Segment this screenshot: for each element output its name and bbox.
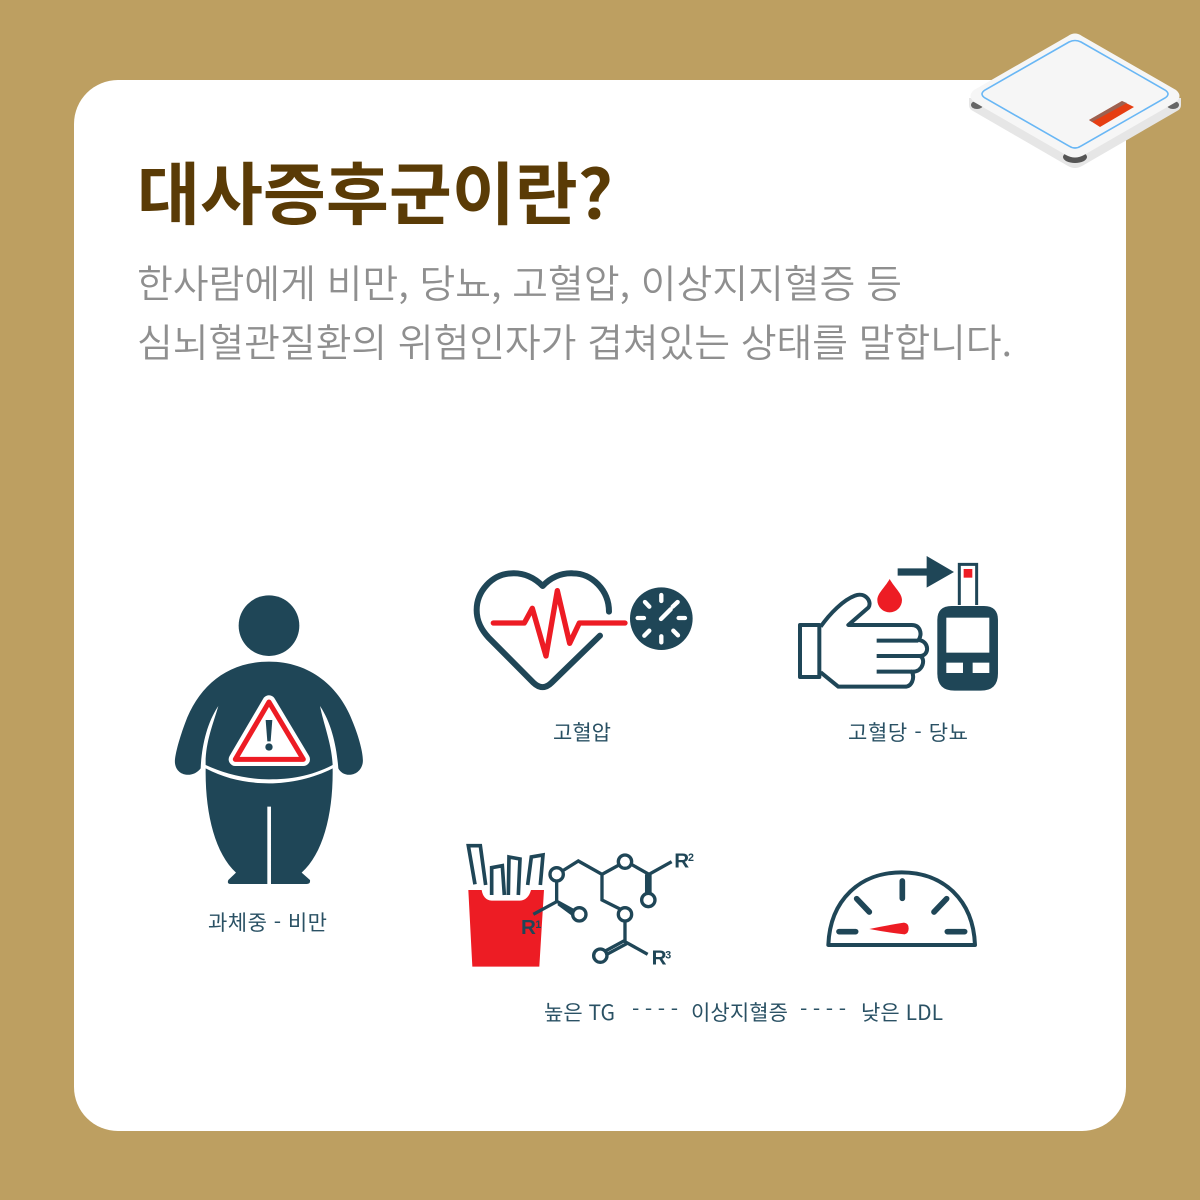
icon: fries and triglyceride molecule: 2 [688,852,694,864]
icon: fries and triglyceride molecule: 3 [665,949,671,961]
icon: fries and triglyceride molecule [468,846,694,969]
icon: overweight person with warning [175,595,363,884]
icon: fries and triglyceride molecule: R [652,946,667,969]
labels: lipid abnormality row: ---- [632,994,678,1024]
icon: fries and triglyceride molecule: R [674,849,689,872]
icon: hand, blood drop and glucose meter [800,556,998,691]
label: high blood sugar: 고혈당 - 당뇨 [848,717,968,747]
icon: fries and triglyceride molecule: 1 [535,919,541,931]
title: 대사증후군이란? [137,140,613,239]
label: overweight: 과체중 - 비만 [208,907,327,937]
intro text block [137,254,1012,369]
intro text block: 한사람에게 비만, 당뇨, 고혈압, 이상지지혈증 등 [137,254,902,310]
labels: lipid abnormality row: 낮은 LDL [861,997,943,1027]
icon: low LDL gauge [828,872,975,945]
labels: lipid abnormality row: ---- [800,994,846,1024]
labels: lipid abnormality row [544,994,943,1027]
icon: heart with blood pressure gauge [477,573,693,687]
intro text block: 심뇌혈관질환의 위험인자가 겹쳐있는 상태를 말합니다. [137,313,1012,369]
white card panel [74,80,1126,1131]
label: hypertension: 고혈압 [553,717,611,747]
icon: bathroom scale [969,34,1181,168]
labels: lipid abnormality row: 높은 TG [544,997,615,1027]
labels: lipid abnormality row: 이상지혈증 [691,997,788,1027]
icon: fries and triglyceride molecule: R [521,916,536,939]
